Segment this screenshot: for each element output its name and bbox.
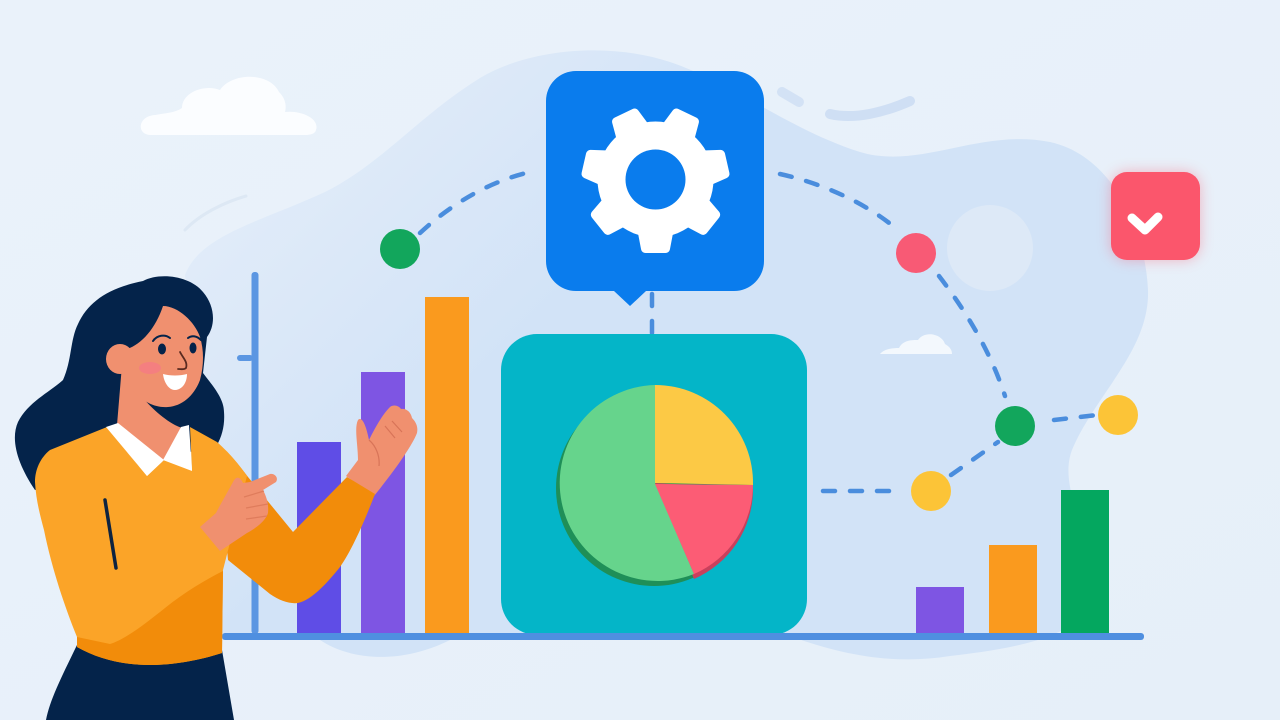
icon: check chevron: [1132, 217, 1158, 230]
baseline axis: [222, 633, 1144, 640]
skirt: [46, 645, 234, 720]
pointing hand: [200, 474, 277, 551]
sleeve crease: [105, 500, 116, 568]
neck: [117, 365, 182, 462]
node: yellow lower: [911, 471, 951, 511]
ear: [106, 344, 134, 374]
node: red: [896, 233, 936, 273]
axis: vertical: [237, 272, 258, 634]
finger lines: [244, 491, 268, 519]
pie chart: [556, 385, 753, 586]
cloud: top left: [141, 77, 317, 135]
face: [123, 306, 203, 407]
pie slice: green: [560, 385, 694, 581]
cloud: small centre right: [880, 334, 952, 354]
mouth: [163, 374, 187, 390]
notification card: [1111, 172, 1200, 260]
bar chart: left: [297, 297, 469, 634]
card body: [546, 71, 764, 306]
arm: right sleeve: [217, 443, 375, 603]
teal panel: [501, 334, 807, 635]
background blob: [185, 50, 1148, 659]
cheek: [139, 362, 161, 374]
raised hand: [346, 406, 417, 496]
settings card: [546, 71, 764, 306]
pie red edge: [655, 483, 753, 579]
pie slice: red: [655, 484, 753, 574]
eyes and brows: [153, 336, 201, 354]
pale circle: [947, 205, 1033, 291]
dashed connectors: [420, 171, 1097, 491]
nose: [178, 352, 186, 369]
sweater shadow: [77, 571, 223, 665]
palm lines: [369, 421, 402, 466]
icon: gear: [585, 111, 726, 249]
bar chart: right: [916, 490, 1109, 634]
node: yellow right: [1098, 395, 1138, 435]
sweater torso: [35, 427, 247, 665]
decorative swooshes: [185, 92, 910, 230]
collar: [106, 423, 192, 476]
woman presenter: [15, 276, 417, 720]
node: green left: [380, 229, 420, 269]
pie shadow: [556, 390, 752, 586]
pie slice: yellow: [655, 385, 753, 485]
node: green right: [995, 406, 1035, 446]
hair: [15, 276, 224, 490]
